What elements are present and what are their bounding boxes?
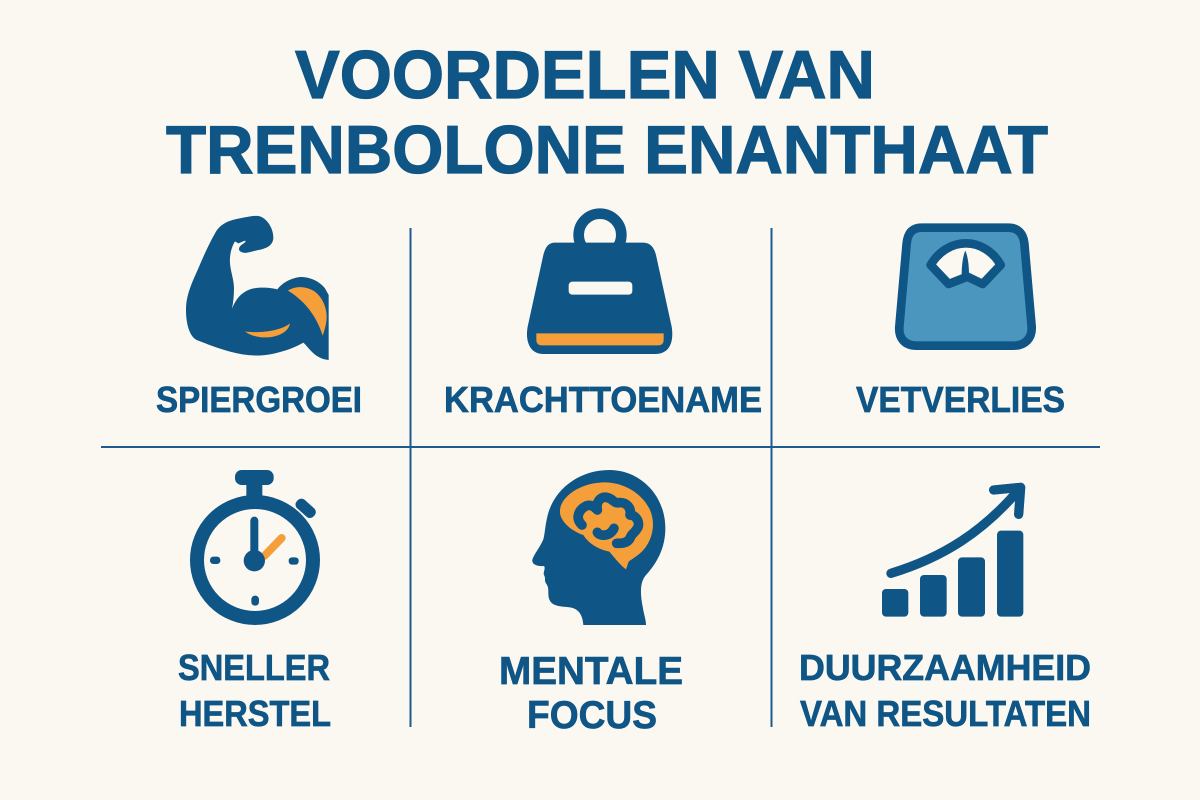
label: mentale focus: FOCUS <box>527 694 657 737</box>
icon: head with brain <box>532 470 665 625</box>
label: vetverlies: VETVERLIES <box>856 379 1065 420</box>
icon: kettlebell weight <box>527 214 672 354</box>
label: mentale focus: MENTALE <box>499 650 683 693</box>
label: spiergroei: SPIERGROEI <box>156 379 362 420</box>
title <box>166 37 1048 188</box>
icon: bathroom scale <box>899 228 1032 346</box>
label: sneller herstel: HERSTEL <box>179 693 331 734</box>
icon: growth bar chart with arrow <box>882 487 1023 617</box>
title: TRENBOLONE ENANTHAAT <box>166 112 1048 188</box>
label: duurzaamheid van resultaten: DUURZAAMHEID <box>799 647 1091 688</box>
label: mentale focus <box>499 650 683 737</box>
label: duurzaamheid van resultaten <box>799 647 1091 734</box>
title: VOORDELEN VAN <box>295 37 875 113</box>
icon: flexed muscle arm <box>186 216 329 360</box>
icon: stopwatch <box>197 470 318 618</box>
label: sneller herstel <box>178 647 331 734</box>
label: krachttoename: KRACHTTOENAME <box>444 379 762 420</box>
label: duurzaamheid van resultaten: VAN RESULTATEN <box>800 693 1091 734</box>
label: sneller herstel: SNELLER <box>178 647 330 688</box>
